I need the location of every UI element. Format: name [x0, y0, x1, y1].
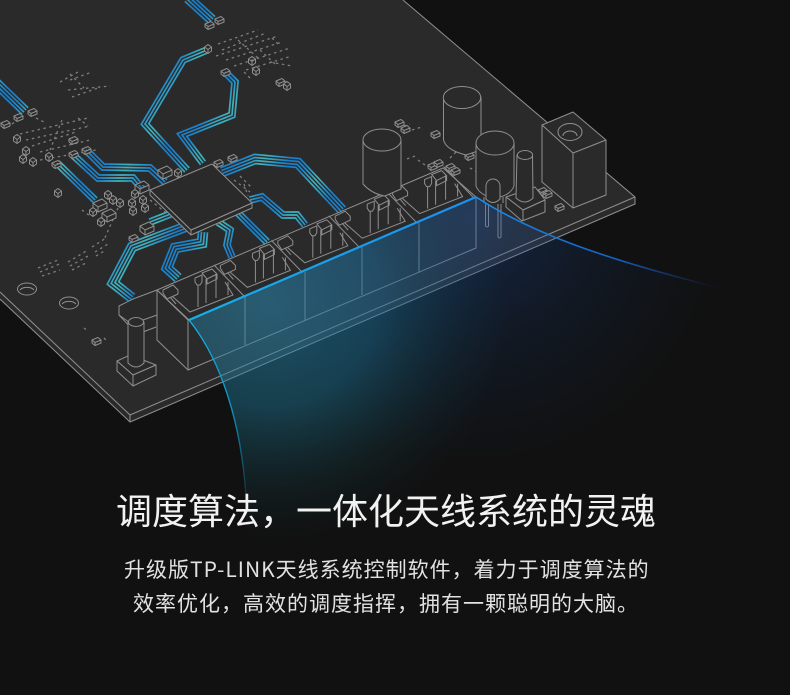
description line two: 效率优化，高效的调度指挥，拥有一颗聪明的大脑。 [133, 588, 639, 618]
main chip [150, 164, 252, 235]
capacitor front [476, 131, 514, 198]
post with base left [117, 290, 157, 386]
beam top edge [189, 197, 476, 320]
board edge lines [0, 0, 635, 422]
mounting holes [18, 283, 78, 309]
led with leads [484, 179, 503, 238]
signal traces [0, 0, 342, 298]
beam right curve [476, 197, 720, 288]
board surface [0, 0, 635, 422]
beam fill teal [189, 197, 720, 540]
solder pad dots [12, 30, 477, 342]
small components [1, 16, 564, 346]
post with base right [506, 150, 545, 221]
port cavities [163, 167, 475, 312]
beam fill blue [189, 197, 720, 540]
blue signal beam [189, 197, 720, 540]
ethernet port block [157, 167, 476, 370]
capacitor left [363, 129, 401, 196]
capacitor back [443, 86, 481, 155]
beam left curve [189, 320, 247, 530]
description line one: 升级版TP-LINK天线系统控制软件，着力于调度算法的 [124, 554, 650, 584]
circuit board [0, 0, 635, 422]
dc power jack [542, 112, 606, 208]
title: 调度算法，一体化天线系统的灵魂 [116, 483, 656, 535]
